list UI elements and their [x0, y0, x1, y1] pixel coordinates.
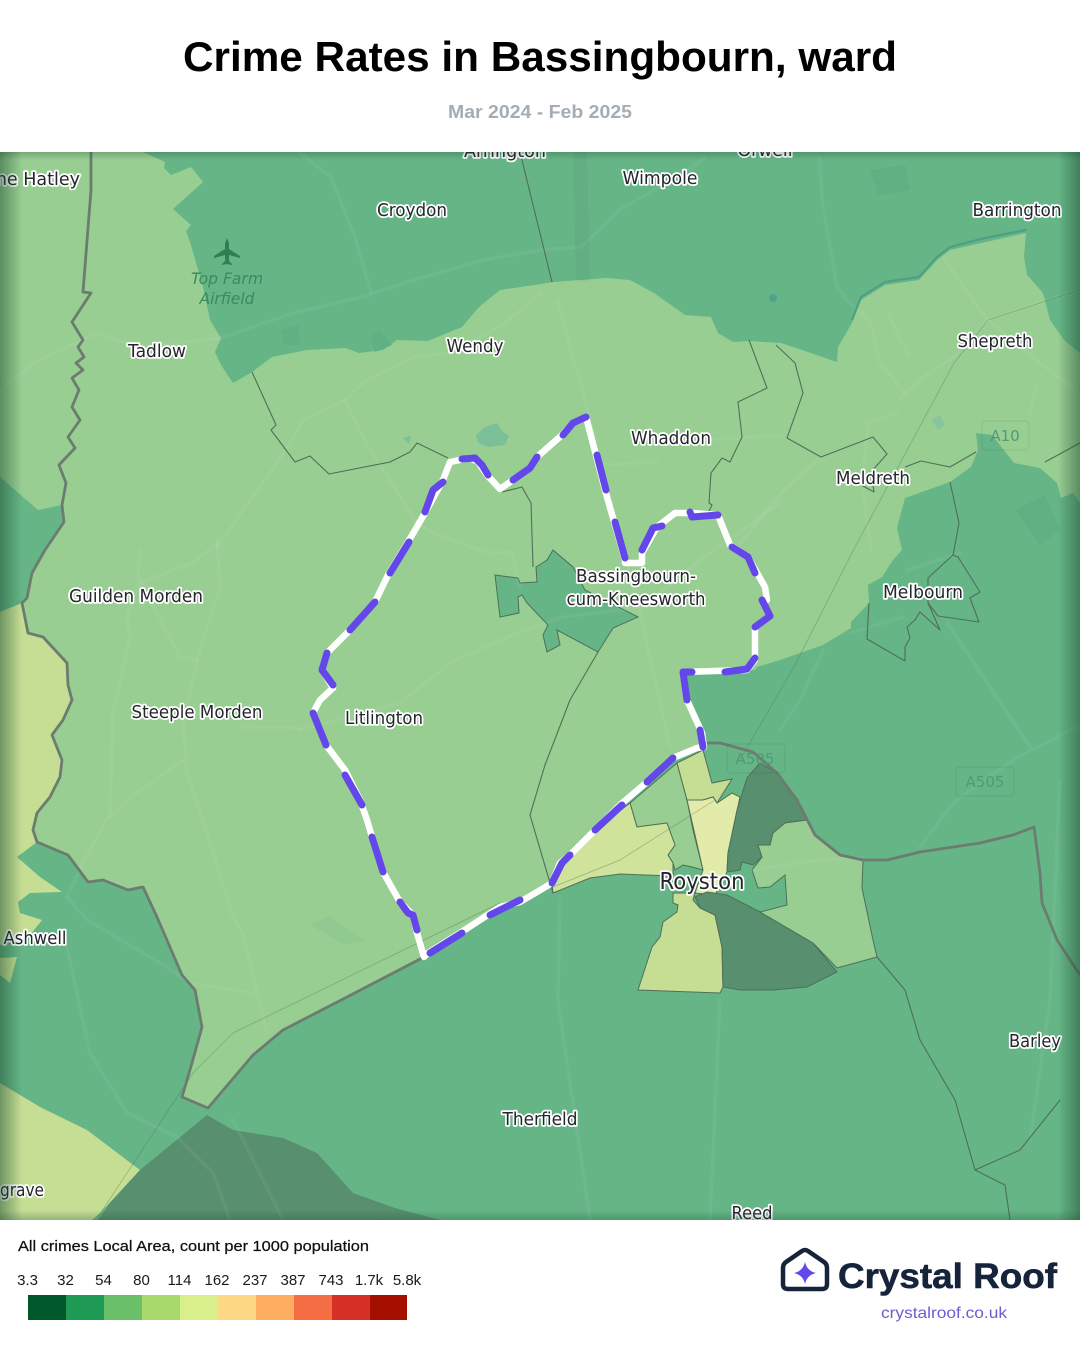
- icon: airfield plane: [214, 238, 240, 265]
- map base: mid-green crime band: [0, 152, 1080, 1220]
- place labels: Therfield: [502, 1110, 578, 1130]
- legend scale values: 387: [280, 1272, 306, 1289]
- ward outline: Bassingbourn: [313, 417, 770, 957]
- place labels: grave: [0, 1181, 44, 1201]
- thin ward boundaries: [252, 152, 1080, 1220]
- place labels: Guilden Morden: [69, 587, 203, 607]
- website link: crystalroof.co.uk: [881, 1305, 1008, 1322]
- legend scale values: 80: [133, 1272, 150, 1289]
- legend: [17, 1238, 422, 1320]
- place labels: Whaddon: [631, 429, 711, 449]
- place labels: Melbourn: [883, 583, 963, 603]
- area: Royston north pale: [677, 750, 732, 803]
- icon: star: [794, 1262, 816, 1284]
- ponds and land-use patches: [312, 294, 945, 944]
- road shield: A505 east: [956, 767, 1014, 796]
- area: dark green south-west band: [98, 1115, 440, 1220]
- road shield: A505 centre: [727, 744, 785, 773]
- legend scale values: 743: [318, 1272, 344, 1289]
- area: Royston east light: [752, 820, 877, 968]
- road shield: A505 centre: A505: [736, 750, 774, 768]
- place labels: Orwell: [738, 141, 792, 161]
- legend scale values: 3.3: [17, 1272, 38, 1289]
- road shield: A10: [982, 421, 1029, 450]
- major road band north: [580, 152, 583, 282]
- place labels: Wimpole: [622, 169, 698, 189]
- map edge vignette: [0, 152, 1080, 1220]
- place labels: Royston: [660, 869, 744, 895]
- area: Royston north-east dark: [727, 763, 807, 872]
- legend title: All crimes Local Area, count per 1000 population: [18, 1238, 369, 1255]
- place labels: Litlington: [345, 709, 423, 729]
- place labels: Tadlow: [127, 342, 186, 362]
- road network: [66, 292, 992, 1214]
- logo wordmark: Crystal Roof: [838, 1257, 1057, 1296]
- place labels: Wendy: [446, 337, 504, 357]
- place labels: Steeple Morden: [132, 703, 262, 723]
- place labels: Arrington: [464, 142, 546, 162]
- legend scale values: 54: [95, 1272, 112, 1289]
- area: Royston south pale: [638, 893, 723, 993]
- legend scale values: 5.8k: [393, 1272, 422, 1289]
- place labels: Reed: [732, 1204, 772, 1224]
- place labels: Meldreth: [836, 469, 910, 489]
- legend colour swatches: [28, 1295, 407, 1320]
- icon: house: [783, 1250, 827, 1289]
- legend scale values: 237: [242, 1272, 268, 1289]
- area: pale west band: [0, 603, 72, 983]
- title: Crime Rates in Bassingbourn, ward: [183, 33, 897, 80]
- legend scale values: 114: [168, 1272, 191, 1289]
- area: Bassingbourn centre mid-green: [495, 550, 638, 652]
- road shield: A10: A10: [990, 427, 1020, 445]
- place labels: [0, 141, 1062, 1224]
- rail and thin lines: [98, 290, 1080, 1217]
- place labels: Bassingbourn-: [576, 567, 696, 587]
- airfield label: Top Farm: [191, 269, 263, 288]
- area: Royston south-east dark: [695, 892, 837, 990]
- legend scale values: 1.7k: [355, 1272, 384, 1289]
- logo: Crystal Roof: [783, 1250, 1057, 1322]
- place labels: Barley: [1009, 1032, 1061, 1052]
- thick district boundaries: [22, 152, 1080, 1108]
- outline white base: [313, 417, 770, 957]
- place labels: cum-Kneesworth: [566, 590, 706, 610]
- river: teal stream: [852, 230, 1026, 320]
- legend scale values: 162: [204, 1272, 230, 1289]
- legend scale values: 32: [57, 1272, 74, 1289]
- legend scale values: [17, 1272, 422, 1289]
- area: pale south-west band: [0, 1083, 140, 1220]
- airfield label: [192, 272, 262, 304]
- place labels: Shepreth: [958, 332, 1032, 352]
- outline purple dashes: [313, 417, 770, 953]
- place labels: Ashwell: [4, 929, 66, 949]
- area: light green low-crime region: [0, 152, 1080, 1108]
- area: Royston central yellow: [687, 793, 740, 895]
- road shield: A505 east: A505: [966, 773, 1004, 791]
- area: Royston west pale: [552, 803, 675, 893]
- area: Royston inner light: [630, 763, 703, 870]
- airfield label: Airfield: [199, 289, 255, 308]
- date range subtitle: Mar 2024 - Feb 2025: [448, 102, 632, 122]
- place labels: Croydon: [377, 201, 447, 221]
- place labels: Barrington: [972, 201, 1062, 221]
